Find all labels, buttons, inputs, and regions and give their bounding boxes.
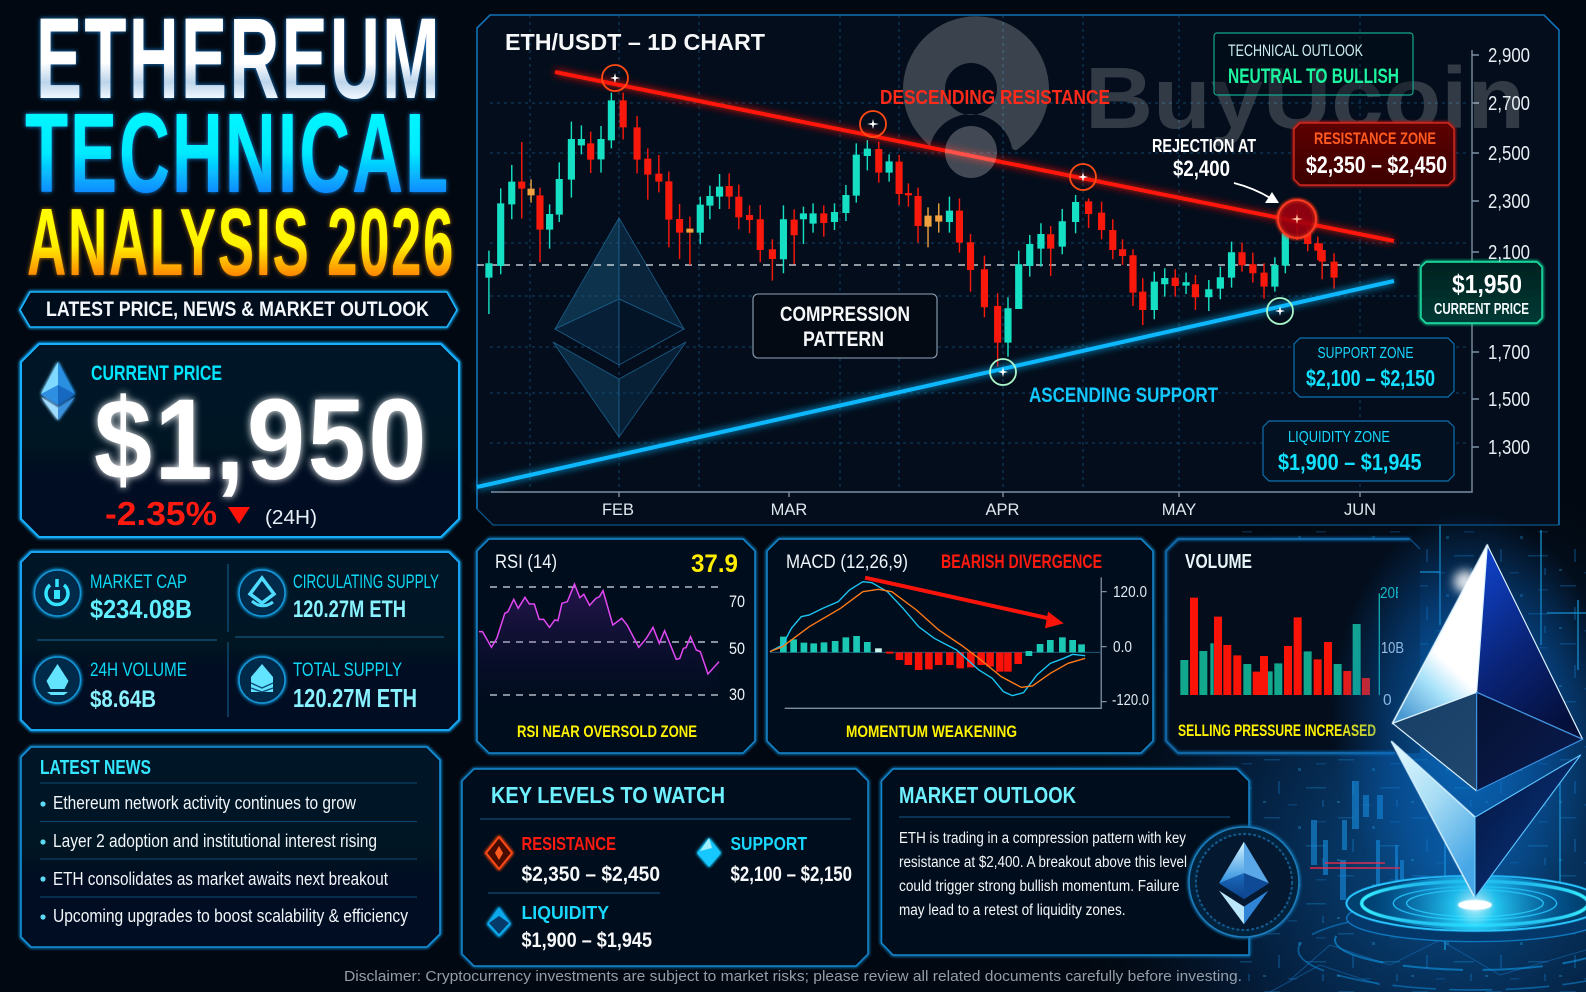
volume axis labels: 10B: [1381, 640, 1404, 657]
stat: total supply: [239, 657, 417, 713]
month axis labels: JUN: [1344, 501, 1376, 519]
label: ascending support: ASCENDING SUPPORT: [1029, 384, 1218, 407]
news list: Ethereum network activity continues to grow: [53, 793, 357, 813]
label: liquidity zone: $1,900 – $1,945: [1278, 449, 1422, 475]
outlook text: resistance at $2,400. A breakout above this level: [899, 854, 1187, 871]
panel: latest news: LATEST NEWS: [40, 756, 151, 779]
panel: RSI: 37.9: [691, 550, 738, 578]
subtitle banner: [20, 292, 457, 327]
support trendline: [477, 281, 1394, 487]
outlook text: could trigger strong bullish momentum. Failure: [899, 878, 1180, 895]
MACD chart: [770, 577, 1107, 708]
panel: current price: [21, 344, 459, 537]
stat: total supply: 120.27M ETH: [293, 683, 417, 713]
level: resistance: RESISTANCE: [522, 834, 616, 854]
resistance trendline: [555, 72, 1394, 241]
month axis labels: [602, 501, 1376, 519]
volume axis labels: [1380, 585, 1404, 709]
price axis labels: 1,500: [1488, 389, 1530, 411]
volume axis labels: 0: [1383, 692, 1392, 709]
icon: ethereum coin: [1189, 827, 1299, 937]
label: compression pattern: [753, 294, 937, 358]
stat: circulating supply: 120.27M ETH: [293, 596, 406, 623]
volume bars: [1184, 593, 1379, 695]
label: current price tag: $1,950: [1452, 269, 1522, 299]
subtitle banner: LATEST PRICE, NEWS & MARKET OUTLOOK: [46, 298, 429, 321]
stat: circulating supply: CIRCULATING SUPPLY: [293, 572, 439, 593]
panel: current price: (24H): [265, 507, 317, 529]
stat: 24h volume: $8.64B: [90, 686, 156, 713]
MACD axis labels: [1112, 584, 1149, 709]
level: support: SUPPORT: [730, 834, 807, 854]
news list: Upcoming upgrades to boost scalability & efficiency: [53, 906, 408, 926]
panel: price chart: [477, 15, 1559, 525]
price axis labels: 2,300: [1488, 191, 1530, 213]
level: liquidity: $1,900 – $1,945: [522, 929, 652, 952]
month axis labels: MAY: [1162, 501, 1196, 519]
label: technical outlook: TECHNICAL OUTLOOK: [1228, 41, 1363, 60]
price axis labels: 2,900: [1488, 45, 1530, 67]
watermark: BuyUcoin: BuyUcoin: [1085, 50, 1525, 147]
outlook text: ETH is trading in a compression pattern with key: [899, 830, 1186, 847]
panel: MACD: MOMENTUM WEAKENING: [846, 722, 1017, 741]
price axis labels: 2,100: [1488, 242, 1530, 264]
panel: MACD: BEARISH DIVERGENCE: [941, 551, 1102, 573]
title: ANALYSIS 2026: [27, 189, 455, 296]
stat: market cap: [34, 570, 192, 624]
label: resistance zone: $2,350 – $2,450: [1306, 152, 1447, 179]
panel: RSI: [477, 539, 755, 753]
label: technical outlook: [1214, 33, 1413, 95]
panel: volume: SELLING PRESSURE INCREASED: [1178, 721, 1376, 740]
news list: ETH consolidates as market awaits next breakout: [53, 869, 388, 889]
label: support zone: SUPPORT ZONE: [1318, 345, 1414, 362]
stat: 24h volume: [34, 657, 187, 713]
RSI axis labels: 30: [729, 685, 745, 704]
level: resistance: [486, 834, 660, 886]
volume axis labels: 20B: [1380, 585, 1404, 602]
panel: current price: -2.35%: [105, 495, 217, 532]
RSI axis labels: 70: [729, 592, 745, 611]
label: rejection: [1152, 135, 1257, 181]
outlook text: [899, 830, 1187, 919]
label: support zone: [1294, 338, 1454, 397]
icon: large ethereum logo on platform: [1298, 510, 1586, 990]
outlook text: may lead to a retest of liquidity zones.: [899, 902, 1126, 919]
label: descending resistance: DESCENDING RESISTANCE: [880, 86, 1110, 109]
touch markers: [602, 65, 1316, 385]
label: resistance zone: [1294, 123, 1454, 185]
label: current price tag: CURRENT PRICE: [1434, 301, 1529, 318]
panel: market outlook: MARKET OUTLOOK: [899, 782, 1076, 808]
title: [25, 0, 455, 296]
panel: current price: $1,950: [94, 376, 429, 504]
level: support: $2,100 – $2,150: [730, 863, 852, 886]
panel: key levels: [462, 769, 868, 966]
news list: Layer 2 adoption and institutional interest rising: [53, 831, 377, 851]
MACD axis labels: -120.0: [1112, 692, 1149, 709]
month axis labels: FEB: [602, 501, 634, 519]
price axis labels: 1,300: [1488, 437, 1530, 459]
chart grid: [490, 15, 1470, 490]
label: resistance zone: RESISTANCE ZONE: [1314, 129, 1436, 148]
label: rejection: REJECTION AT: [1152, 135, 1257, 156]
month axis labels: APR: [986, 501, 1020, 519]
chart title: ETH/USDT – 1D CHART: [505, 29, 765, 55]
label: liquidity zone: LIQUIDITY ZONE: [1288, 429, 1390, 446]
label: compression pattern: COMPRESSION: [780, 303, 910, 326]
panel: RSI: RSI NEAR OVERSOLD ZONE: [517, 722, 697, 741]
price axis labels: 2,500: [1488, 143, 1530, 165]
MACD axis labels: 0.0: [1113, 639, 1132, 656]
faint ethereum logo: [553, 218, 686, 437]
panel: volume: [1166, 539, 1420, 753]
level: liquidity: LIQUIDITY: [522, 903, 609, 923]
month axis labels: MAR: [771, 501, 807, 519]
icon: ethereum: [41, 362, 75, 420]
stat: 24h volume: 24H VOLUME: [90, 659, 187, 681]
panel: key levels: KEY LEVELS TO WATCH: [491, 782, 725, 808]
label: liquidity zone: [1263, 421, 1454, 481]
current price dashed line: [477, 264, 1421, 266]
candles: first half: [489, 93, 1019, 367]
MACD axis labels: 120.0: [1113, 584, 1147, 601]
price axis labels: 1,700: [1488, 342, 1530, 364]
panel: MACD: [767, 539, 1153, 753]
price axis labels: [1488, 45, 1530, 459]
platform: [1298, 876, 1586, 990]
level: liquidity: [487, 903, 652, 952]
level: resistance: $2,350 – $2,450: [522, 863, 660, 886]
label: technical outlook: NEUTRAL TO BULLISH: [1228, 65, 1399, 88]
news list: [40, 793, 408, 926]
label: rejection: $2,400: [1173, 156, 1230, 181]
RSI line: [479, 584, 719, 707]
panel: RSI: RSI (14): [495, 551, 557, 573]
axes: [491, 50, 1479, 497]
level: support: [697, 834, 852, 886]
label: compression pattern: PATTERN: [803, 328, 884, 351]
arrow: rejection: [1234, 183, 1279, 203]
stat: total supply: TOTAL SUPPLY: [293, 659, 402, 681]
panel: latest news: [21, 747, 440, 947]
panel: current price: CURRENT PRICE: [91, 362, 222, 385]
title: TECHNICAL: [25, 90, 450, 216]
price axis labels: 2,700: [1488, 93, 1530, 115]
stat: market cap: MARKET CAP: [90, 571, 187, 593]
watermark: BuyUcoin: [903, 16, 1525, 178]
panel: market outlook: [882, 769, 1249, 955]
panel: volume: VOLUME: [1185, 551, 1252, 573]
panel: MACD: MACD (12,26,9): [786, 551, 908, 573]
RSI axis labels: [729, 592, 745, 704]
RSI axis labels: 50: [729, 639, 745, 658]
lower chevron facets: [1392, 742, 1581, 898]
label: support zone: $2,100 – $2,150: [1306, 365, 1435, 391]
arrow: bearish divergence: [865, 578, 1064, 628]
stat: market cap: $234.08B: [90, 594, 192, 624]
candles: second half: [1030, 195, 1334, 325]
panel: market stats: [21, 552, 459, 730]
stat: circulating supply: [239, 570, 439, 623]
label: current price tag: [1421, 262, 1542, 323]
upper diamond facets: [1393, 545, 1583, 791]
disclaimer: Disclaimer: Cryptocurrency investments are subject to market risks; please review all related documents carefully before investing.: [344, 968, 1242, 985]
